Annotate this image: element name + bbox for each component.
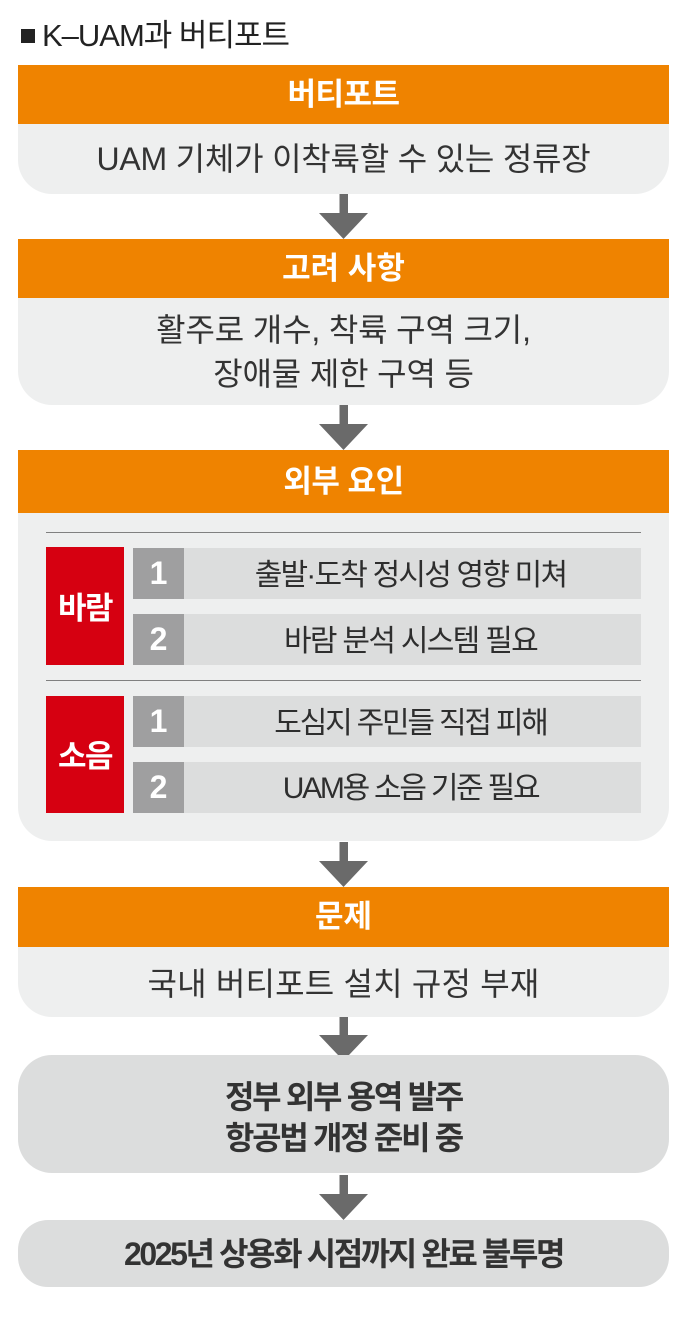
arrow <box>319 405 368 450</box>
noise tag: 소음 <box>58 739 112 774</box>
arrow <box>319 842 368 887</box>
panel: vertiport heading <box>18 65 669 124</box>
panel: external factors heading <box>18 450 669 513</box>
panel: considerations heading: 고려 사항 <box>282 251 405 286</box>
panel: problem heading <box>18 887 669 947</box>
wind item 2 number <box>133 614 184 665</box>
panel: considerations heading <box>18 239 669 298</box>
panel: external factors body <box>18 513 669 841</box>
arrow <box>319 1017 368 1055</box>
wind item 2 text <box>184 614 641 665</box>
panel: problem heading: 문제 <box>315 899 372 934</box>
title: K–UAM과 버티포트 <box>42 18 289 53</box>
panel: vertiport heading: 버티포트 <box>287 77 400 112</box>
wind item 1 number: 1 <box>150 555 167 591</box>
panel: considerations description <box>18 298 669 405</box>
noise item 1 number: 1 <box>150 703 167 739</box>
noise item 1 text: 도심지 주민들 직접 피해 <box>274 707 547 740</box>
panel: considerations description: 장애물 제한 구역 등 <box>213 356 474 392</box>
wind item 1 text: 출발·도착 정시성 영향 미쳐 <box>255 559 566 592</box>
panel: external factors heading: 외부 요인 <box>283 464 404 499</box>
panel: problem description: 국내 버티포트 설치 규정 부재 <box>147 966 540 1002</box>
arrow <box>319 1175 368 1220</box>
panel: outlook <box>18 1220 669 1287</box>
panel: government response: 항공법 개정 준비 중 <box>225 1120 462 1156</box>
panel: considerations description: 활주로 개수, 착륙 구역 크기, <box>156 312 531 348</box>
panel: vertiport description <box>18 124 669 194</box>
panel: government response <box>18 1055 669 1173</box>
noise item 1 text <box>184 696 641 747</box>
noise item 2 text: UAM용 소음 기준 필요 <box>283 772 538 805</box>
noise item 2 text <box>184 762 641 813</box>
wind item 2 text: 바람 분석 시스템 필요 <box>284 625 537 658</box>
noise item 2 number: 2 <box>150 769 167 805</box>
wind tag: 바람 <box>58 591 112 626</box>
panel: vertiport description: UAM 기체가 이착륙할 수 있는 정류장 <box>96 141 591 177</box>
wind item 2 number: 2 <box>150 621 167 657</box>
noise item 1 number <box>133 696 184 747</box>
arrow <box>319 194 368 239</box>
wind item 1 text <box>184 548 641 599</box>
wind item 1 number <box>133 548 184 599</box>
noise item 2 number <box>133 762 184 813</box>
panel: problem description <box>18 947 669 1017</box>
noise tag <box>46 696 124 813</box>
panel: government response: 정부 외부 용역 발주 <box>225 1079 462 1115</box>
panel: outlook: 2025년 상용화 시점까지 완료 불투명 <box>124 1236 563 1272</box>
wind tag <box>46 547 124 665</box>
